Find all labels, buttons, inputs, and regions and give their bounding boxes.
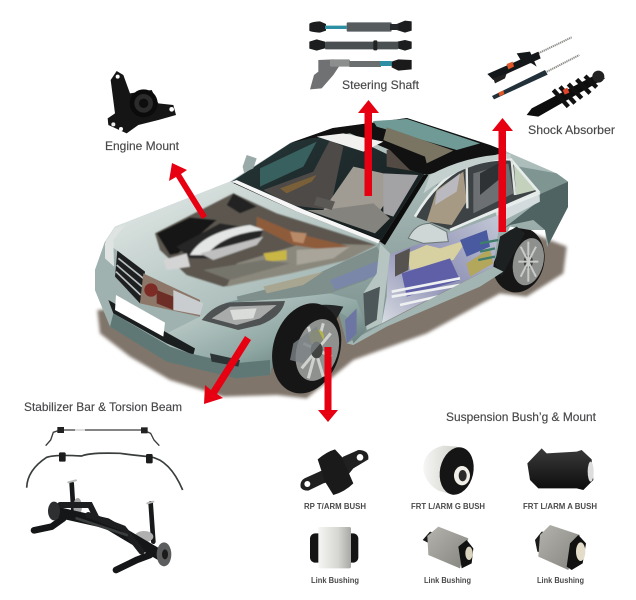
inner wing and suspension tower xyxy=(237,247,387,307)
arrow: to suspension bushes xyxy=(318,347,338,422)
lower stabilizer bar xyxy=(27,453,183,490)
dark dash band xyxy=(233,180,380,242)
ground shadow xyxy=(97,230,567,398)
engine cover xyxy=(177,223,263,258)
rear quarter panel xyxy=(502,182,568,245)
label: RP T/ARM BUSH: RP T/ARM BUSH xyxy=(304,502,366,511)
arrow: to stabilizer bar xyxy=(204,336,251,404)
arrow: to shock absorber xyxy=(492,118,513,232)
wing mirror far side xyxy=(243,155,257,173)
engine bay xyxy=(155,193,377,287)
lower bumper xyxy=(110,313,270,378)
bush: link bushing 2 xyxy=(423,527,473,568)
left glass reflection xyxy=(260,142,317,187)
upper stabilizer bar xyxy=(46,430,159,446)
rear seats xyxy=(387,140,443,173)
bush: link bushing 3 xyxy=(535,525,586,570)
front nose and bumper xyxy=(95,225,270,378)
label: shock absorber: Shock Absorber xyxy=(528,123,615,137)
rear seat through window xyxy=(473,163,513,213)
windshield lower trim xyxy=(232,180,380,243)
left headlamp xyxy=(105,225,125,267)
steering shaft parts xyxy=(309,21,412,89)
door cutaway interior xyxy=(382,213,503,323)
label: engine mount: Engine Mount xyxy=(105,139,180,153)
bush: link bushing 1 xyxy=(310,527,358,568)
front fender xyxy=(165,293,367,378)
bush: FRT L/ARM G xyxy=(423,444,478,498)
shock absorber parts xyxy=(487,37,605,117)
sill xyxy=(347,267,503,345)
bush: FRT L/ARM A xyxy=(527,448,594,490)
label: steering shaft: Steering Shaft xyxy=(342,78,420,92)
a-pillar xyxy=(380,175,428,245)
licence plate xyxy=(115,295,165,337)
bumper slot xyxy=(108,300,195,355)
internal radiator view xyxy=(140,273,200,317)
headlamp xyxy=(202,301,285,330)
windshield and interior xyxy=(232,128,443,242)
stabilizer bars and torsion beam xyxy=(27,427,183,570)
front seat through window xyxy=(427,172,467,225)
roof with glass sunroof xyxy=(290,118,507,175)
rear wheel xyxy=(486,223,551,297)
side mirror xyxy=(408,223,448,243)
heading: stabilizer bar and torsion beam: Stabilizer Bar & Torsion Beam xyxy=(24,400,182,414)
wiring and parts xyxy=(263,250,287,262)
a-pillar base panel xyxy=(363,243,390,330)
bush: RP T/ARM xyxy=(300,449,368,495)
copper manifold xyxy=(257,217,350,252)
label: FRT L/ARM A BUSH: FRT L/ARM A BUSH xyxy=(523,502,597,511)
side window opening xyxy=(415,158,538,230)
grille xyxy=(115,251,145,303)
window frames xyxy=(415,159,538,230)
door panel and seat xyxy=(263,140,343,210)
torsion beam axle xyxy=(34,480,171,570)
label: link bushing 2: Link Bushing xyxy=(424,576,471,585)
rear tyre and coil over cut door xyxy=(495,227,525,277)
car cutaway illustration xyxy=(95,118,568,402)
door handle and belt line xyxy=(450,193,540,230)
engine mount part xyxy=(108,71,176,133)
quarter glass xyxy=(514,165,536,195)
hood panel xyxy=(105,182,378,317)
label: FRT L/ARM G BUSH: FRT L/ARM G BUSH xyxy=(411,502,485,511)
label: link bushing 3: Link Bushing xyxy=(537,576,584,585)
front wheel xyxy=(261,295,357,402)
arrow: to steering shaft xyxy=(358,100,379,196)
label: link bushing 1: Link Bushing xyxy=(311,576,359,585)
car body shell xyxy=(95,118,568,378)
black left engine area xyxy=(157,217,217,255)
lighter right part of the bay xyxy=(227,243,377,287)
heading: suspension bushing and mount: Suspension Bush’g & Mount xyxy=(446,410,597,424)
arrow: to engine mount xyxy=(169,163,207,219)
